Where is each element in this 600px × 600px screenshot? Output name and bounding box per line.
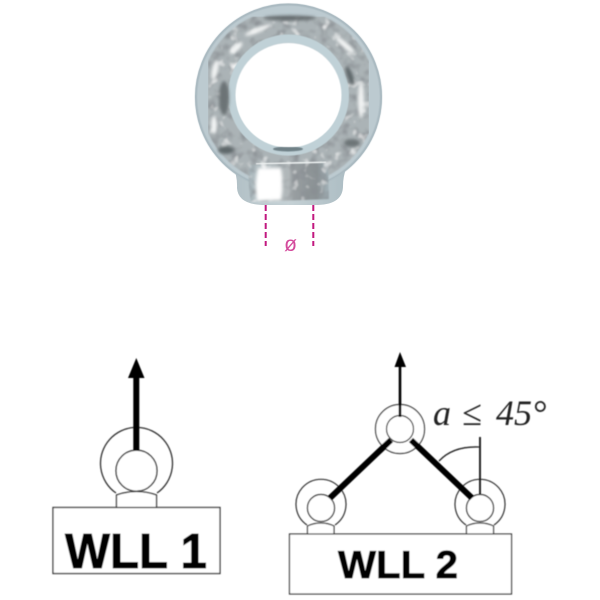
left nut bbox=[308, 523, 334, 534]
right sling bbox=[411, 440, 472, 498]
left sling bbox=[330, 440, 391, 498]
ring textured band bbox=[216, 24, 362, 170]
diagram: WLL 2 two-leg lift bbox=[290, 352, 546, 594]
load box bbox=[53, 508, 220, 574]
top ring inner bbox=[386, 416, 414, 442]
lift arrow bbox=[394, 352, 406, 417]
dashed guide left bbox=[265, 205, 267, 246]
load label: WLL 1 bbox=[65, 525, 207, 579]
angle label: a bbox=[433, 393, 451, 433]
top ring outer bbox=[376, 404, 424, 454]
nut white facet bbox=[256, 168, 282, 201]
diagram: WLL 1 single lift bbox=[53, 358, 220, 579]
load box bbox=[290, 534, 512, 594]
eye ring inner circle bbox=[116, 450, 157, 491]
photo: galvanized eye nut bbox=[196, 4, 381, 205]
ring inner bevel bbox=[232, 38, 345, 152]
angle label: 45° bbox=[496, 393, 546, 433]
right nut bbox=[466, 523, 494, 534]
dashed guide right bbox=[312, 205, 314, 246]
left eye ring outer bbox=[296, 479, 346, 525]
eye ring outline bbox=[101, 427, 173, 493]
nut bbox=[116, 492, 156, 507]
threaded hole shadow bbox=[273, 146, 303, 152]
angle label: ≤ bbox=[462, 393, 482, 433]
right eye ring outer bbox=[455, 479, 505, 525]
ring highlights and shadows bbox=[210, 16, 364, 154]
lift arrow bbox=[128, 358, 144, 450]
eye hole bbox=[236, 43, 342, 147]
diameter marker bbox=[266, 205, 313, 256]
nut base flange bbox=[221, 150, 356, 205]
vertical reference line bbox=[479, 437, 481, 495]
load label: WLL 2 bbox=[338, 544, 458, 587]
hex nut body bbox=[249, 163, 329, 202]
diameter symbol: ø bbox=[284, 233, 297, 256]
eye ring body bbox=[216, 24, 362, 170]
left eye ring inner bbox=[308, 494, 334, 522]
right eye ring inner bbox=[466, 494, 494, 522]
angle arc bbox=[439, 447, 479, 461]
nut top highlight bbox=[256, 162, 326, 164]
